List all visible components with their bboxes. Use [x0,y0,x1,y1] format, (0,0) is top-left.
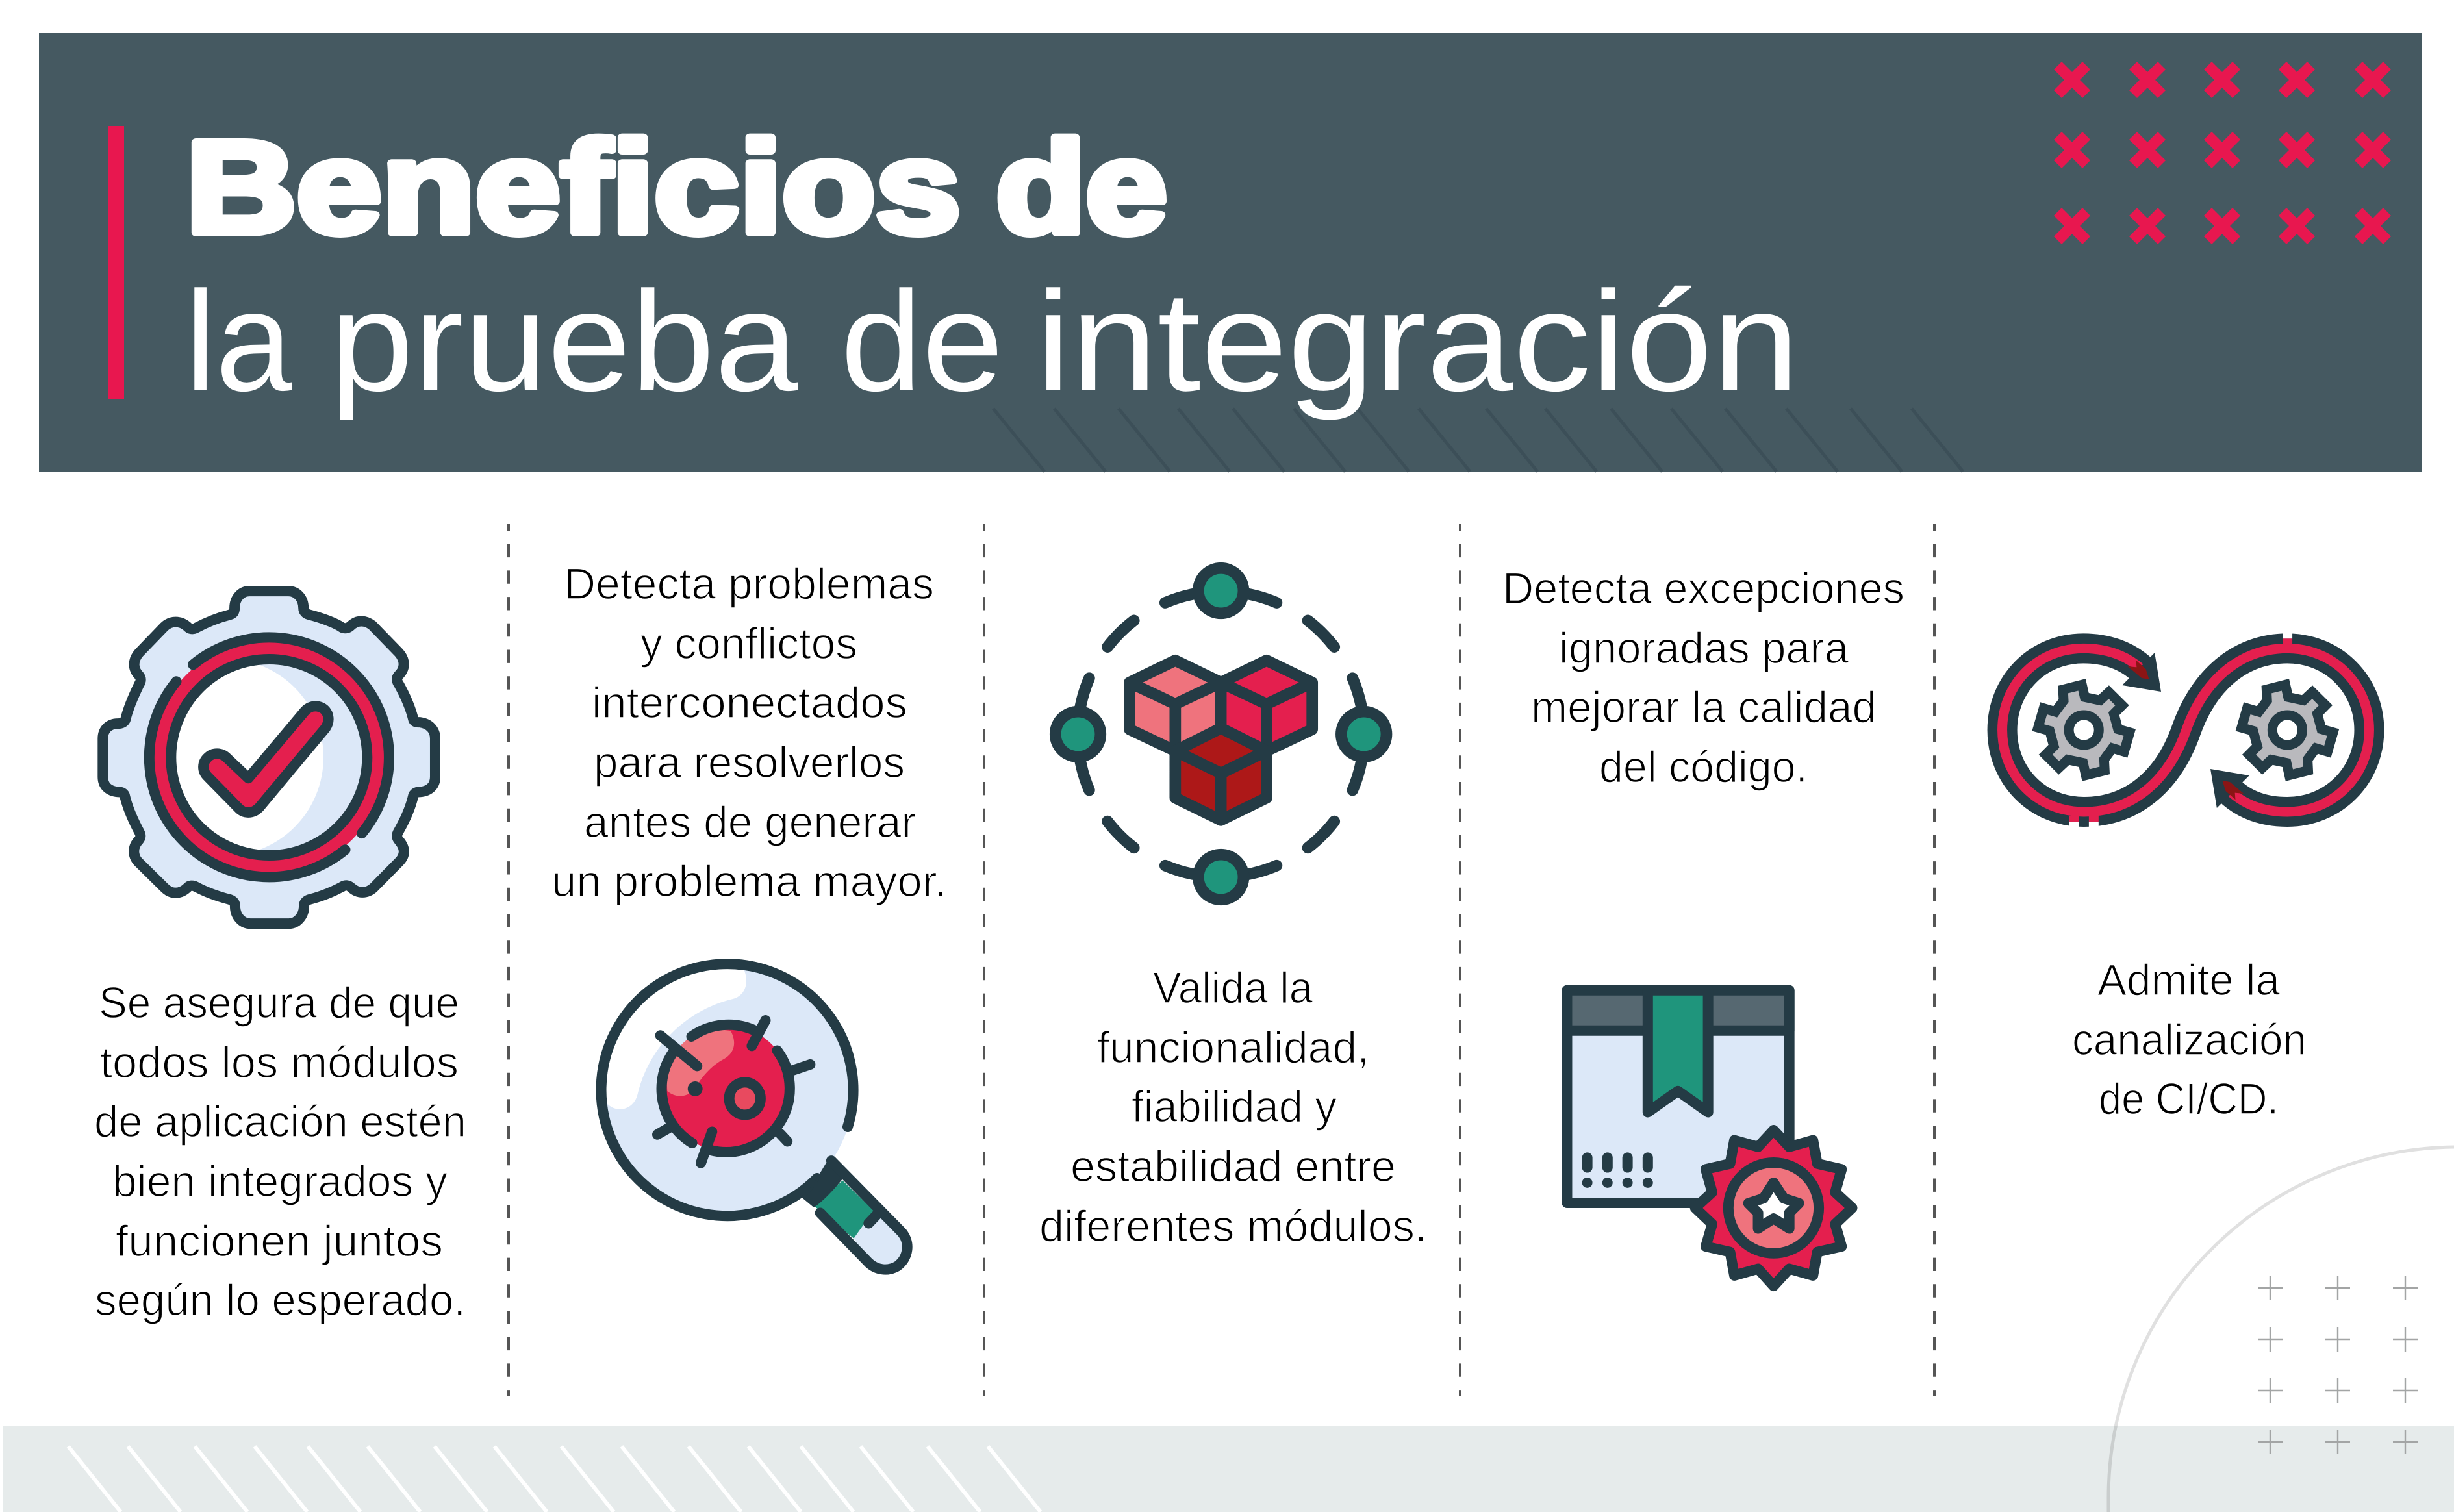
icon: magnifier with bug [596,959,907,1270]
text: column 2: un problema mayor. [551,857,947,906]
text: column 3: fiabilidad y [1132,1082,1337,1131]
text: column 5: canalización [2072,1015,2307,1065]
text: column 3 [1039,963,1427,1251]
text: column 3: funcionalidad, [1097,1023,1369,1072]
bottom band [3,1426,2454,1512]
icon: cubes with nodes [1056,568,1386,900]
text: column 5: Admite la [2097,955,2280,1005]
title: la [185,262,292,421]
header banner [39,33,2422,472]
decorative x marks [2058,66,2387,240]
text: column 4: mejorar la calidad [1531,683,1877,732]
text: column 2: Detecta problemas [564,559,934,609]
text: column 3: Valida la [1153,963,1313,1013]
text: column 3: diferentes módulos. [1039,1202,1427,1251]
text: column 1: todos los módulos [100,1038,459,1087]
text: column 1: Se asegura de que [99,978,459,1027]
text: column 5: de CI/CD. [2099,1074,2279,1124]
text: column 4: ignoradas para [1559,624,1849,673]
column dividers [509,524,1934,1396]
text: column 4 [1502,564,1904,792]
title: prueba [330,262,798,421]
title: de [841,262,1004,421]
text: column 2 [551,559,947,906]
title: de [996,114,1167,260]
text: column 1: según lo esperado. [95,1276,466,1325]
text: column 4: del código. [1599,742,1808,792]
text: column 4: Detecta excepciones [1502,564,1904,613]
text: column 2: interconectados [592,678,907,727]
title [185,114,1799,421]
title: Beneficios [186,114,961,260]
text: column 1: bien integrados y [112,1157,448,1206]
text: column 1 [94,978,466,1325]
text: column 1: de aplicación estén [94,1097,466,1146]
red accent bar [108,126,124,399]
text: column 5 [2072,955,2307,1124]
icon: infinity pipeline with gears [2003,631,2369,828]
icon: gear with check [103,591,435,924]
text: column 1: funcionen juntos [116,1216,443,1266]
text: column 2: para resolverlos [594,738,905,787]
text: column 2: antes de generar [584,798,916,847]
text: column 2: y conflictos [640,619,857,668]
decorative arc and plus grid [2108,1147,2454,1512]
text: column 3: estabilidad entre [1070,1142,1396,1191]
icon: package with badge [1567,990,1852,1286]
title: integración [1036,262,1799,421]
